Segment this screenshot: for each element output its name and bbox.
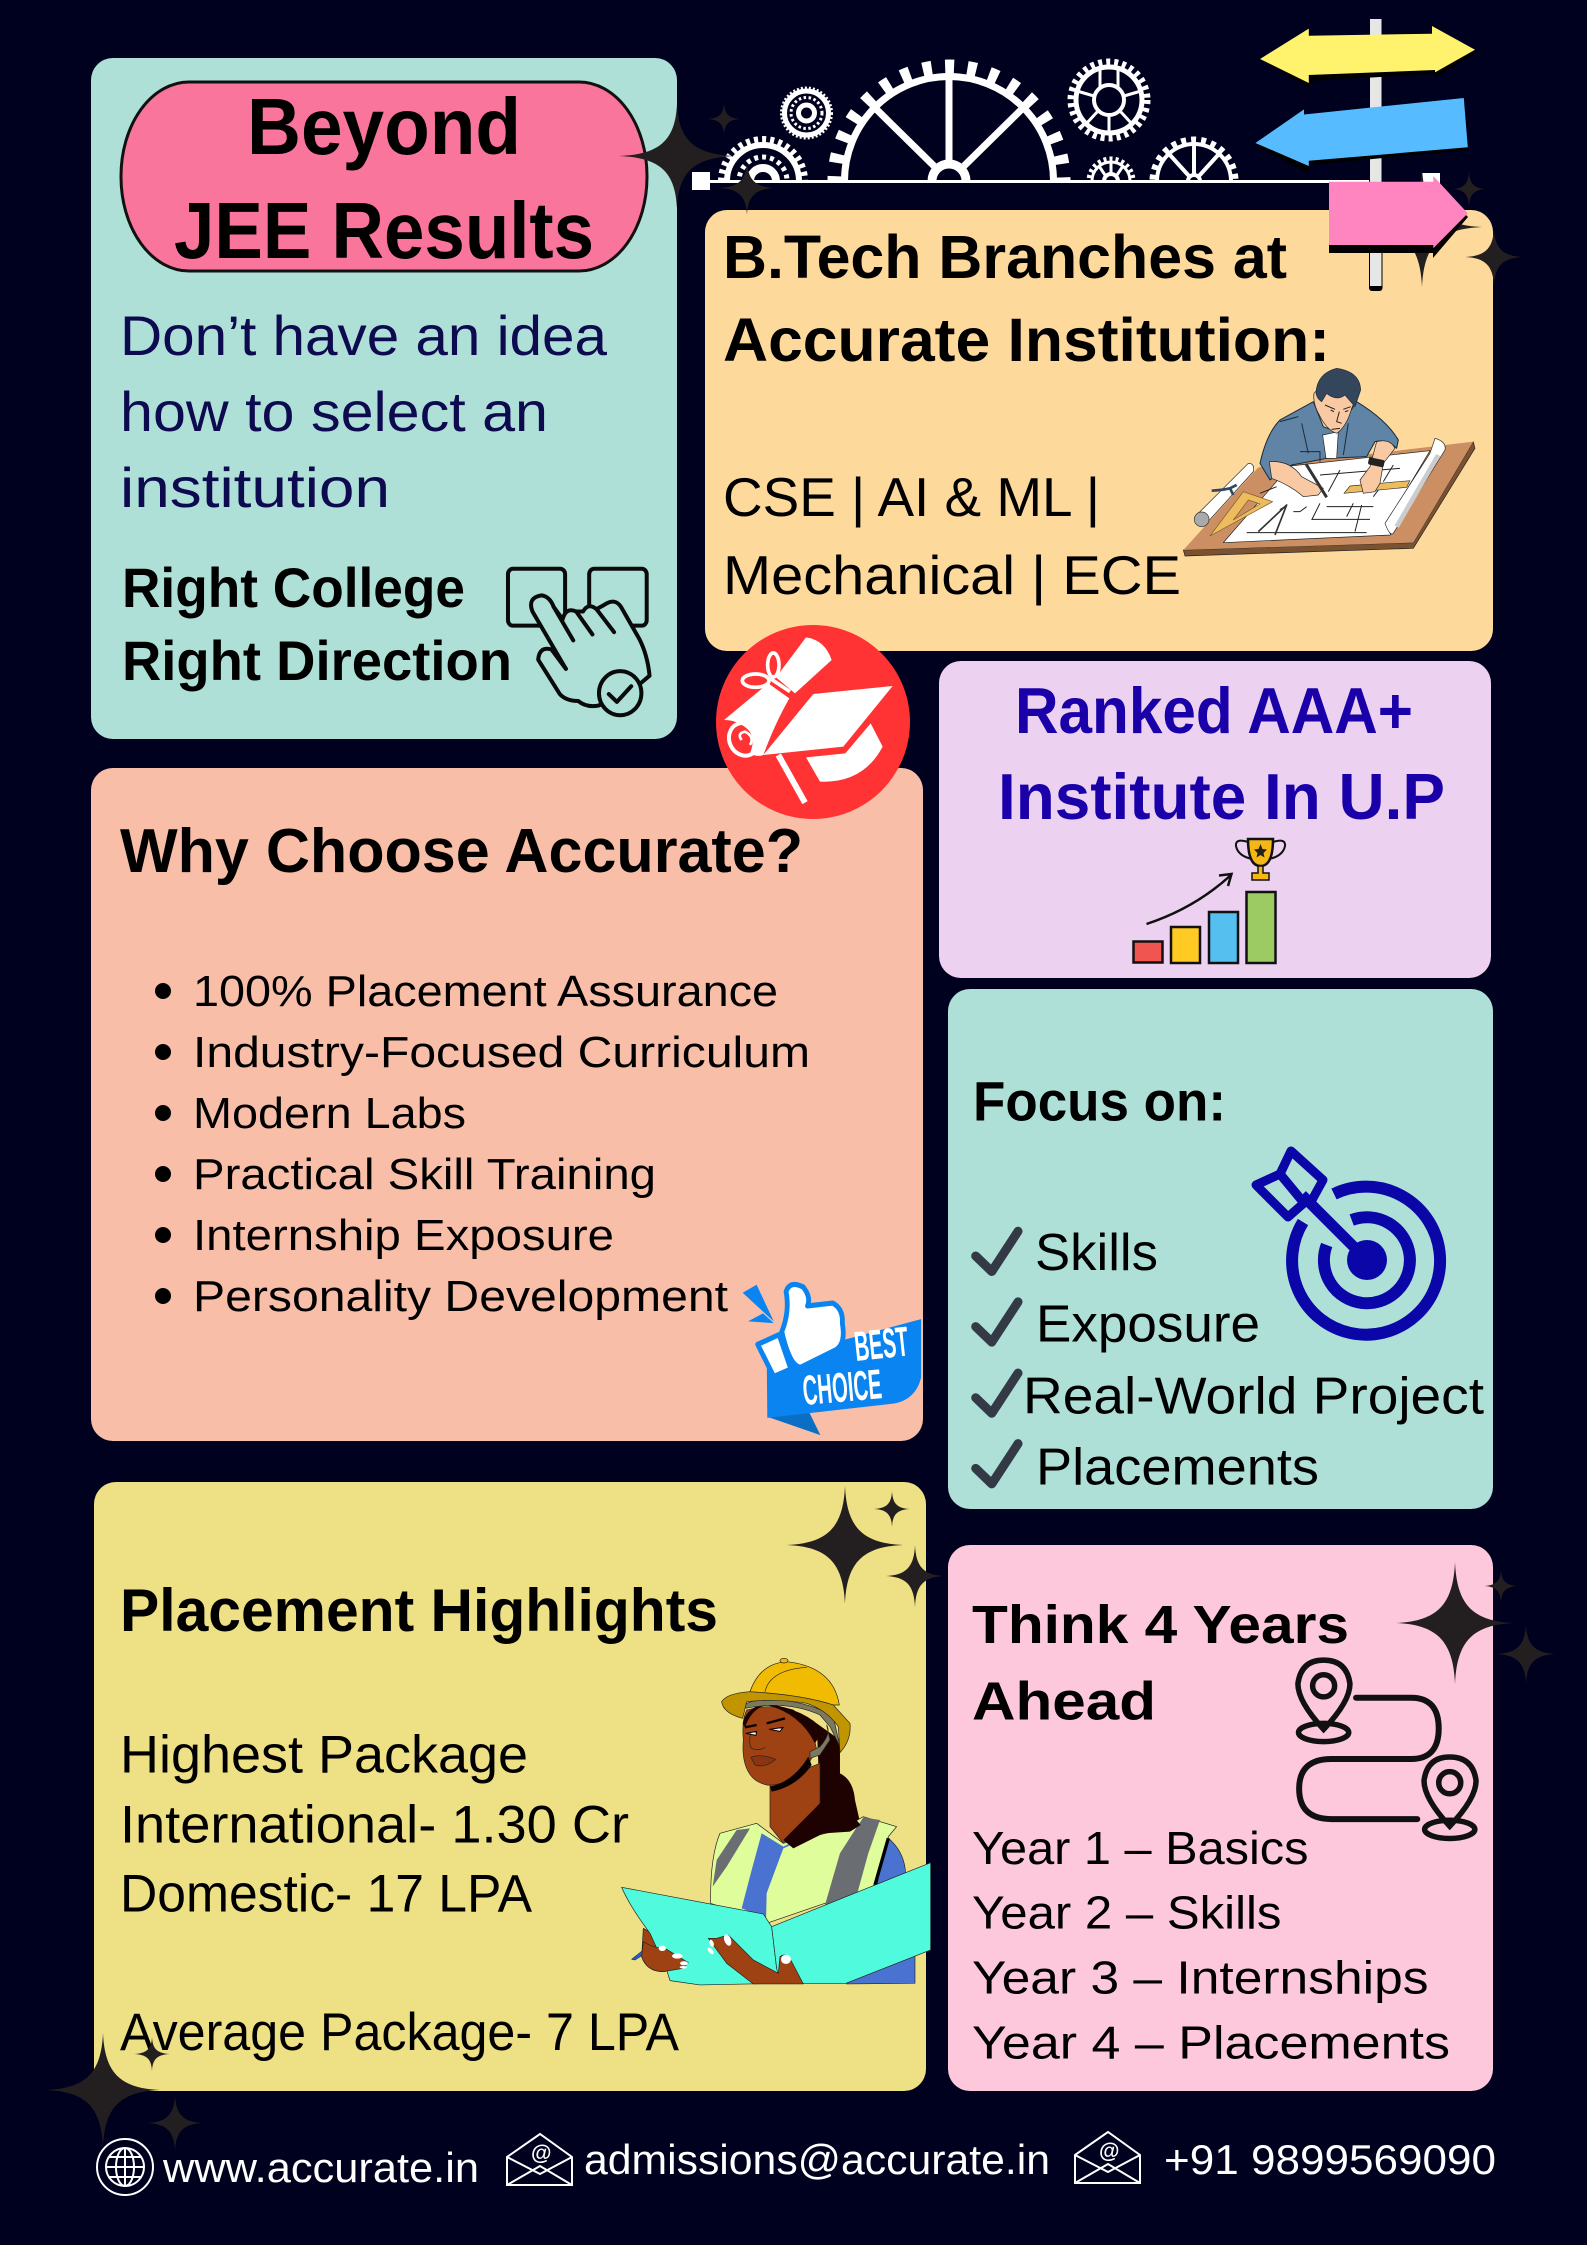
sign: blue arrow bbox=[1255, 98, 1468, 173]
icon: target with arrow bbox=[1256, 1151, 1440, 1335]
badge: best choice: BEST bbox=[852, 1318, 911, 1370]
sign: yellow double arrow bbox=[1260, 26, 1475, 88]
title pill: JEE Results bbox=[174, 186, 594, 275]
sparkle: think ahead small bbox=[1484, 1569, 1518, 1603]
icon: diploma and graduation cap bbox=[716, 625, 910, 819]
gears decoration bbox=[718, 60, 1238, 180]
sparkle: behind pink sign bbox=[1362, 167, 1482, 287]
focus heading: Focus on: bbox=[973, 1070, 1226, 1132]
placement figures: International- 1.30 Cr bbox=[120, 1796, 629, 1854]
intro text: how to select an bbox=[120, 380, 548, 443]
gear: top small spoked bbox=[1071, 62, 1147, 138]
focus list: Skills bbox=[1035, 1224, 1158, 1282]
ranked heading: Ranked AAA+ bbox=[1015, 674, 1413, 747]
focus list: Placements bbox=[1036, 1438, 1319, 1496]
intro text: institution bbox=[120, 456, 390, 519]
sparkle: think ahead large bbox=[1396, 1562, 1514, 1684]
branches list: Mechanical | ECE bbox=[723, 544, 1181, 606]
intro text bbox=[120, 304, 608, 519]
tagline bbox=[122, 556, 512, 692]
why choose list: Personality Development bbox=[193, 1272, 728, 1321]
branches heading: B.Tech Branches at bbox=[723, 223, 1287, 291]
intro text: Don’t have an idea bbox=[120, 304, 608, 367]
placement heading: Placement Highlights bbox=[120, 1577, 718, 1644]
phone number: +91 9899569090 bbox=[1164, 2136, 1496, 2183]
panel: placement bbox=[94, 1482, 926, 2091]
why choose list bbox=[155, 967, 810, 1321]
email address: admissions@accurate.in bbox=[584, 2136, 1050, 2183]
sparkle: top small bbox=[707, 103, 741, 135]
placement figures bbox=[120, 1726, 680, 2062]
badge: best choice: CHOICE bbox=[801, 1360, 883, 1414]
sparkle: think ahead medium bbox=[1496, 1624, 1556, 1684]
title pill bbox=[121, 82, 647, 275]
sparkle: near title bbox=[619, 104, 735, 208]
why choose heading: Why Choose Accurate? bbox=[120, 817, 803, 886]
placement figures: Highest Package bbox=[120, 1726, 528, 1784]
gear: small ring bbox=[782, 88, 832, 138]
why choose list: Modern Labs bbox=[193, 1089, 466, 1138]
tagline: Right Direction bbox=[122, 629, 512, 692]
icon: phone envelope: @ bbox=[1099, 2140, 1119, 2163]
icon: route with location pins bbox=[1298, 1660, 1476, 1838]
why choose list: Practical Skill Training bbox=[193, 1150, 656, 1199]
sparkle: placement large bbox=[787, 1486, 903, 1604]
sign: pink arrow bbox=[1329, 176, 1468, 258]
icon: phone envelope bbox=[1075, 2132, 1140, 2183]
check marks bbox=[976, 1231, 1018, 1484]
sparkle: bottom left small bbox=[134, 2037, 170, 2071]
sparkle: under gears bbox=[719, 161, 775, 215]
icon: hand selecting bbox=[508, 569, 650, 715]
focus list: Exposure bbox=[1036, 1296, 1260, 1354]
icon: email envelope: @ bbox=[531, 2142, 551, 2165]
badge: best choice bbox=[743, 1284, 921, 1435]
title pill: Beyond bbox=[247, 82, 521, 171]
panel: ranked bbox=[939, 661, 1491, 978]
branches heading bbox=[723, 223, 1330, 374]
panel: branches bbox=[705, 210, 1493, 651]
placement figures: Average Package- 7 LPA bbox=[120, 2003, 680, 2062]
icon: growth bars with trophy bbox=[1134, 839, 1285, 963]
icon: globe bbox=[97, 2139, 153, 2195]
four-year plan bbox=[972, 1822, 1450, 2068]
four-year plan: Year 4 – Placements bbox=[972, 2016, 1450, 2068]
panel: focus bbox=[948, 989, 1493, 1509]
sparkle: bottom left large bbox=[46, 2033, 160, 2147]
illustration: woman with hard hat and folder bbox=[622, 1658, 931, 1985]
panel: think ahead bbox=[948, 1545, 1493, 2091]
branches list bbox=[723, 466, 1181, 606]
think ahead heading: Think 4 Years bbox=[972, 1595, 1349, 1655]
focus list bbox=[1023, 1224, 1485, 1496]
sparkle: placement small bbox=[874, 1491, 910, 1527]
placement figures: Domestic- 17 LPA bbox=[120, 1864, 533, 1924]
four-year plan: Year 2 – Skills bbox=[972, 1886, 1282, 1938]
why choose list: 100% Placement Assurance bbox=[193, 967, 778, 1016]
ranked heading bbox=[998, 674, 1445, 833]
why choose list: Industry-Focused Curriculum bbox=[193, 1028, 810, 1077]
panel: intro bbox=[91, 58, 677, 739]
sparkle: bottom left medium bbox=[147, 2095, 203, 2151]
tagline: Right College bbox=[122, 556, 465, 619]
four-year plan: Year 1 – Basics bbox=[972, 1822, 1308, 1874]
think ahead heading: Ahead bbox=[972, 1672, 1156, 1732]
branches list: CSE | AI & ML | bbox=[723, 466, 1100, 528]
website: www.accurate.in bbox=[162, 2144, 479, 2191]
panel: why choose bbox=[91, 768, 923, 1441]
think ahead heading bbox=[972, 1595, 1349, 1732]
four-year plan: Year 3 – Internships bbox=[972, 1952, 1428, 2004]
focus list: Real-World Project bbox=[1023, 1368, 1485, 1426]
why choose list: Internship Exposure bbox=[193, 1211, 614, 1260]
signpost pole bbox=[1369, 19, 1382, 291]
ranked heading: Institute In U.P bbox=[998, 760, 1445, 833]
sparkle: right of sign bbox=[1452, 171, 1486, 207]
branches heading: Accurate Institution: bbox=[723, 306, 1330, 374]
illustration: engineer drafting bbox=[1183, 368, 1475, 556]
sparkle: placement medium bbox=[886, 1545, 944, 1607]
icon: email envelope bbox=[507, 2134, 572, 2185]
sparkle: panel corner bbox=[1465, 228, 1523, 286]
baseline of gears bbox=[692, 172, 1440, 190]
